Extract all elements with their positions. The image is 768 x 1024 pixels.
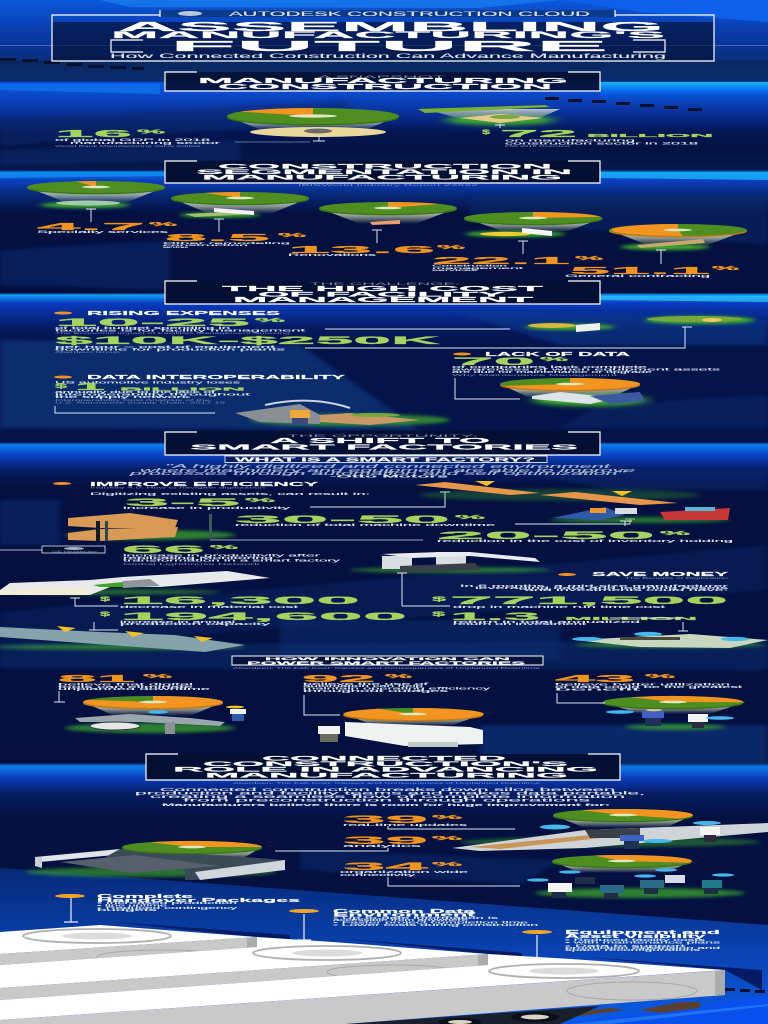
source note: Aberdeen: The Fab Cost: Causes and Consequences of Unplanned Downtime: [233, 781, 541, 785]
segment: renovations: %: [437, 245, 468, 251]
heading: connected construction's role: MANUFACTURING: [205, 772, 568, 780]
stat: 92 percent: %: [385, 674, 415, 680]
stat: 92 percent: 92: [302, 674, 378, 685]
block: rising expenses: The Economic Impact of Facilities Management Sourcing: [55, 331, 291, 335]
stat: 39 percent real-time updates: 39: [343, 814, 428, 826]
stat: 81 percent: %: [143, 674, 176, 680]
heading: segmentation: [165, 161, 600, 183]
segment: other remodeling: %: [278, 233, 309, 239]
block: data interoperability: [54, 375, 346, 404]
icon: pallets: [0, 626, 245, 652]
stat: 43 percent: of data could be the greatest: [555, 685, 742, 689]
block: lack of data: %: [540, 357, 571, 363]
block: data interoperability: US automotive industry loses: [55, 380, 240, 384]
stat: 16,300: 16,300: [120, 595, 360, 607]
block: rising expenses: Aberdeen Group: [55, 350, 121, 354]
segment: construction management: %: [575, 256, 606, 262]
stat: 81 percent: tools can eliminate: [58, 685, 194, 689]
subheading: what is a smart factory: [225, 456, 547, 464]
stat: 92 percent: throughout outages: [303, 689, 450, 693]
heading: the challenge: [165, 281, 600, 304]
quote: "A highly digitized and connected environment: [165, 464, 613, 470]
block: improve efficiency: [53, 482, 370, 496]
stat: 16,300: $: [100, 597, 112, 603]
marker and text: complete handover packages: [55, 894, 300, 922]
marker and text: equipment and asset visibility: • Reduced facility costs: [565, 938, 707, 942]
stat: 66 percent: %: [210, 545, 241, 551]
base machinery: [345, 1002, 768, 1024]
stat: 16,300: [100, 595, 360, 609]
stat: 92 percent: automation can help: [303, 684, 424, 688]
subheading: what is a smart factory: WHAT IS A SMART FACTORY?: [235, 458, 537, 464]
platform: common data environment: [0, 937, 488, 1000]
segment: renovations: Renovations: [288, 253, 377, 257]
stat: 20-50 percent: %: [660, 531, 694, 537]
segment: construction management: [432, 212, 606, 272]
segment: general contracting: %: [712, 266, 742, 272]
segment: renovations: 13.6: [288, 245, 438, 256]
stat: 39 percent real-time updates: real-time updates: [343, 823, 468, 827]
segment: other remodeling: 8.5: [165, 232, 271, 244]
stat: 81 percent: unplanned downtime: [58, 687, 211, 691]
heading: the challenge: OF FACILITY: [258, 292, 509, 298]
stat: 92 percent: [302, 674, 492, 693]
quote: -Otto Motors: [330, 474, 452, 478]
icon: robot arms: [350, 552, 550, 606]
title panel: MANUFACTURING'S: [111, 30, 665, 40]
stat: 34 percent connectivity: connectivity: [340, 873, 416, 877]
heading: how innovation can power smart factories: [232, 656, 543, 666]
stat: 72 billion: on manufacturing: [505, 138, 635, 142]
segment: other remodeling: Other remodeling: [163, 241, 292, 245]
pie: 16 percent: [227, 108, 399, 141]
pie: 81 percent with gauge and worker: [54, 691, 246, 734]
stat: 16 percent: %: [137, 130, 168, 136]
block: lack of data: of companies lack complete: [452, 365, 647, 369]
marker and text: equipment and asset visibility: Equipment and: [565, 930, 720, 936]
block: data interoperability: U.S. Automotive Supply Chain, 2017 19: [55, 400, 227, 404]
stat: 43 percent: benefit: [555, 688, 641, 692]
heading: segmentation: SEGMENTATION IN: [196, 169, 574, 176]
stat: 39 percent analytics: %: [432, 836, 466, 842]
quote: [126, 464, 636, 478]
block: data interoperability: DATA INTEROPERABILITY: [87, 375, 346, 381]
icon: machine and worker: [235, 401, 450, 426]
title panel: ASSEMBLING: [118, 19, 664, 34]
block: data interoperability: Interoperability Cost Analysis of the: [55, 398, 212, 402]
pie with conveyor and workers: [452, 809, 768, 851]
block: rising expenses: downtime for production plants: [55, 348, 286, 352]
stat: 34 percent connectivity: organization wide: [340, 870, 469, 874]
segment: construction management: management: [432, 266, 524, 270]
stat: 771,500: drop in machine run time cost: [453, 605, 665, 609]
stat: 771,500: $: [432, 597, 449, 603]
marker and text: common data environment: Common Data: [333, 909, 479, 915]
connector lines: [305, 327, 692, 348]
stat: 39 percent analytics: analytics: [343, 844, 422, 848]
block: rising expenses: $10K-$250K: [55, 335, 440, 347]
segment: other remodeling: services: [163, 245, 189, 249]
stat: 3-5 percent: 3-5: [125, 497, 240, 509]
stat: 30-50 percent: reduction of total machine downtime: [235, 523, 495, 527]
stat: 72 billion: $: [482, 130, 492, 136]
block: rising expenses: RISING EXPENSES: [87, 311, 281, 317]
stat: 66 percent: replicating Monitoring: [123, 556, 274, 560]
header logo strip: AUTODESK CONSTRUCTION CLOUD: [229, 11, 591, 18]
heading: connected construction's role: CONSTRUCTION'S: [203, 761, 572, 768]
block: lack of data: Why Maintenance Management: [452, 373, 618, 377]
icon: conveyors: [415, 481, 700, 505]
stat: 16 percent: 16: [55, 129, 135, 140]
marker and text: common data environment: • Up-to-date information is: [333, 916, 500, 920]
block: lack of data: are due for maintenance or upgrade: [452, 370, 652, 374]
block: save money: and investments could have:: [525, 588, 728, 592]
intro text: production and facility teams and makes data portable,: [135, 790, 645, 796]
stat: 1.3 million: return on investment: [453, 622, 586, 626]
connector bracket: [55, 406, 215, 413]
quote: where machinery and equipment are able to improve: [140, 468, 636, 474]
stat: 16 percent: World Bank Manufacturing Value Added: [55, 144, 201, 148]
segment: specialty services: Specialty services: [37, 230, 169, 234]
source note: Aberdeen: The Fab Cost: Causes and Consequences of Unplanned Downtime: [233, 666, 541, 670]
block: rising expenses: per hour = cost of equipment: [55, 345, 275, 349]
marker and text: equipment and asset visibility: [522, 930, 722, 958]
heading: the challenge: THE CHALLENGE:: [310, 281, 460, 286]
segment: renovations: [288, 202, 468, 257]
pie: 92 percent with control panels: [304, 695, 484, 747]
marker and text: equipment and asset visibility: space reconfigurations: [565, 948, 702, 952]
title panel: [52, 15, 714, 61]
stat: 72 billion: BILLION: [587, 133, 713, 138]
intro text: [135, 787, 645, 807]
heading: the challenge: MANAGEMENT: [233, 297, 537, 304]
pie with control room: [25, 841, 285, 880]
slab shadows: [113, 922, 762, 990]
segment: other remodeling: construction: [163, 243, 250, 247]
stat: 16,300: decrease in material cost: [120, 605, 298, 609]
pie: 70 percent and equipment: [455, 378, 648, 406]
stat: 3-5 percent: increase in productivity: [123, 506, 291, 510]
block: rising expenses: %: [255, 318, 289, 324]
marker and text: complete handover packages: • line uptime: [97, 904, 168, 908]
stat: 72 billion: construction sector in 2018: [505, 142, 698, 146]
stat: 771,500: 771,500: [450, 595, 728, 607]
heading: a snapshot: A SNAPSHOT: [318, 74, 448, 79]
block: rising expenses: of total budget spending in: [55, 326, 230, 330]
heading: connected construction's role: ROLE IN ADVANCING: [173, 766, 598, 774]
connector line: [210, 539, 423, 541]
connector line: [235, 141, 310, 143]
heading: connected construction's role: [146, 754, 620, 780]
source note: IBISWorld Industry Report 23622: [298, 183, 479, 187]
connector lines: [89, 618, 688, 631]
stat: 30-50 percent: 30-50: [235, 514, 450, 526]
stat: 66 percent: 66: [122, 544, 205, 556]
stat: 81 percent: 81: [58, 674, 138, 685]
stat: 30-50 percent: [235, 514, 495, 527]
heading: how innovation can power smart factories: POWER SMART FACTORIES: [247, 660, 525, 666]
stat: 39 percent real-time updates: [343, 814, 515, 829]
stat: 771,500: [432, 595, 728, 609]
stat: 3-5 percent: %: [245, 498, 279, 504]
platform: complete handover packages: [0, 925, 257, 965]
intro text: Connected construction breaks down silos between: [160, 787, 617, 792]
block: lack of data: LACK OF DATA: [485, 352, 630, 358]
stat: 66 percent: increase in productivity after: [123, 554, 324, 558]
block: save money: SAVE MONEY: [592, 572, 729, 578]
stat: 20-50 percent: [437, 530, 733, 543]
heading: how innovation can power smart factories: HOW INNOVATION CAN: [265, 656, 511, 661]
icon: boxes on shelf: [65, 513, 235, 541]
stat: 43 percent: %: [645, 674, 679, 680]
heading: a snapshot: MANUFACTURING: [198, 78, 571, 85]
block: data interoperability: annually due to the lack of: [55, 390, 215, 394]
block: improve efficiency: Industry 4.0: How to navigate digitization: [90, 486, 267, 490]
stat: 34 percent connectivity: 34: [343, 861, 434, 873]
marker and text: complete handover packages: • Reduced contingency: [97, 906, 238, 910]
heading: the opportunity: SMART FACTORIES: [190, 444, 580, 452]
connector line: [515, 519, 635, 524]
stat: 39 percent analytics: 39: [343, 835, 428, 847]
block: rising expenses: 10-25: [55, 317, 250, 329]
stat: 66 percent: Global Lighthouse Network: [123, 562, 262, 566]
heading: the opportunity: [165, 431, 600, 455]
stat: 43 percent: 43: [555, 674, 638, 685]
icon: metal rolls: [0, 571, 270, 606]
stat: 43 percent: [555, 674, 742, 692]
segment: other remodeling: [163, 192, 309, 249]
intro text: from preconstruction through operations: [183, 798, 594, 802]
block: rising expenses: [54, 311, 440, 354]
stat: 16 percent: of global GDP in 2018: [55, 138, 210, 142]
block: save money: The Benefits of Digitization: [625, 576, 729, 580]
stat: 39 percent analytics: [275, 835, 466, 851]
stat: 30-50 percent: %: [455, 515, 489, 521]
pie with team of people: [527, 855, 745, 899]
stat: 81 percent: [58, 674, 211, 691]
stat: 20-50 percent: 20-50: [437, 530, 655, 542]
stat: 16 percent: [55, 129, 224, 148]
marker and text: complete handover packages: Handover Packages: [97, 898, 300, 904]
stat: 66 percent: [122, 544, 342, 566]
stat: 194,600: [100, 611, 407, 626]
marker and text: equipment and asset visibility: Asset Visibility: [565, 934, 708, 940]
stat: 92 percent: maintain operating efficiency: [303, 686, 492, 690]
stat: 194,600: increase in annual: [120, 620, 236, 624]
block: data interoperability: interoperability throughout: [55, 392, 250, 396]
stat: 72 billion: FMI 2018 Overview: [505, 144, 572, 148]
block: improve efficiency: IMPROVE EFFICIENCY: [90, 482, 319, 488]
segment: construction management: Construction: [432, 264, 508, 268]
header logo strip: [160, 10, 615, 18]
stat: 194,600: 194,600: [120, 611, 407, 623]
heading: segmentation: CONSTRUCTION: [218, 164, 554, 170]
block: save money: In 6 months, a mid-size manufacturer: [460, 584, 732, 588]
block: improve efficiency: Digitizing existing assets, can result in:: [90, 491, 370, 496]
segment: specialty services: [27, 181, 180, 234]
block: save money: [460, 572, 732, 592]
stat: 20-50 percent: reduction in the cost of inventory holding: [437, 539, 733, 543]
intro text: creating a seamless flow of complete information: [150, 794, 627, 799]
stat: 34 percent connectivity: %: [432, 862, 466, 868]
stat: 1.3 million: [432, 611, 697, 626]
segment: specialty services: 4.7: [37, 222, 148, 233]
block: data interoperability: $: [55, 384, 69, 390]
segment: construction management: 22.1: [432, 256, 573, 267]
marker and text: common data environment: Environment: [333, 912, 476, 918]
icon: robot and worker: [550, 507, 730, 526]
block: data interoperability: 1: [75, 382, 107, 393]
stat: 43 percent: believe better utilization: [555, 682, 731, 686]
block: rising expenses: factories is for facility management: [55, 328, 305, 332]
stat: 1.3 million: return in total annualized: [453, 620, 641, 624]
stat: 3-5 percent: [123, 497, 291, 510]
pie: 43 percent with people: [557, 693, 745, 730]
stat: 81 percent: believe that digital: [58, 682, 194, 686]
segment: specialty services: %: [149, 222, 180, 228]
stat: 34 percent connectivity: [340, 861, 520, 886]
stat: 39 percent real-time updates: %: [432, 815, 466, 821]
block: lack of data: 70: [452, 356, 535, 368]
block: data interoperability: BILLION: [120, 386, 245, 392]
marker and text: equipment and asset visibility: • Data to support: [565, 944, 686, 948]
stat: 66 percent: transformation in a smart factory: [123, 558, 342, 562]
segment: general contracting: 51.1: [570, 265, 711, 277]
block: save money: leveraging data and learning assets: [475, 586, 729, 590]
small logo box: GE Healthcare: [52, 550, 99, 554]
stat: 72 billion: 72: [500, 129, 580, 140]
heading: the challenge: THE HIGH COST: [222, 286, 547, 293]
icon: money stacks: [525, 316, 755, 332]
heading: a snapshot: CONSTRUCTION: [218, 84, 552, 91]
heading: the opportunity: THE OPPORTUNITY:: [287, 433, 478, 438]
segment: construction management: services: [432, 268, 479, 272]
small logo box: [0, 546, 105, 554]
stat: 194,600: $: [100, 612, 112, 618]
connector line: [310, 492, 450, 507]
icon: machine with data clouds: [572, 632, 768, 648]
heading: a snapshot: [165, 72, 600, 91]
stat: 1.3 million: 1.3: [450, 611, 540, 623]
heading: segmentation: MANUFACTURING: [202, 174, 562, 182]
stat: 1.3 million: $: [432, 612, 448, 618]
marker and text: complete handover packages: budgets: [97, 908, 159, 912]
marker and text: equipment and asset visibility: production expansion and: [565, 946, 721, 950]
stat: 92 percent: believe the use of: [303, 682, 429, 686]
marker and text: common data environment: [289, 909, 539, 940]
icon: money and building: [418, 105, 560, 128]
marker and text: common data environment: • Faster project completion time: [333, 920, 529, 924]
block: data interoperability: the supply network: [55, 395, 192, 399]
marker and text: complete handover packages: • Increased production: [97, 901, 238, 905]
segment: general contracting: [565, 224, 747, 278]
stat: 16 percent: manufacturing sector: [70, 141, 224, 145]
segment: general contracting: General contracting: [565, 274, 710, 278]
stat: 72 billion: [482, 129, 713, 148]
stat: 194,600: production capacity: [120, 622, 272, 626]
marker and text: common data environment: • Lower costs during construction: [333, 923, 539, 927]
heading: connected construction's role: CONNECTED: [262, 756, 508, 762]
marker and text: equipment and asset visibility: • with maintenance plans: [565, 940, 722, 944]
platform: equipment and asset visibility: [0, 954, 725, 1024]
title panel: FUTURE: [170, 38, 608, 55]
block: lack of data: awareness of when equipment assets: [452, 368, 721, 372]
marker and text: complete handover packages: Complete: [97, 894, 193, 900]
quote: processes through automation and self optimization": [126, 471, 626, 477]
stat: 1.3 million: MILLION: [565, 616, 697, 621]
block: lack of data: [452, 352, 721, 377]
title panel: How Connected Construction Can Advance Manufacturing: [110, 54, 666, 60]
heading: the opportunity: A SHIFT TO: [270, 438, 493, 445]
intro text: Manufacturers believe there is room for huge improvement for:: [162, 802, 610, 807]
marker and text: common data environment: accessible from anywhere: [333, 918, 469, 922]
